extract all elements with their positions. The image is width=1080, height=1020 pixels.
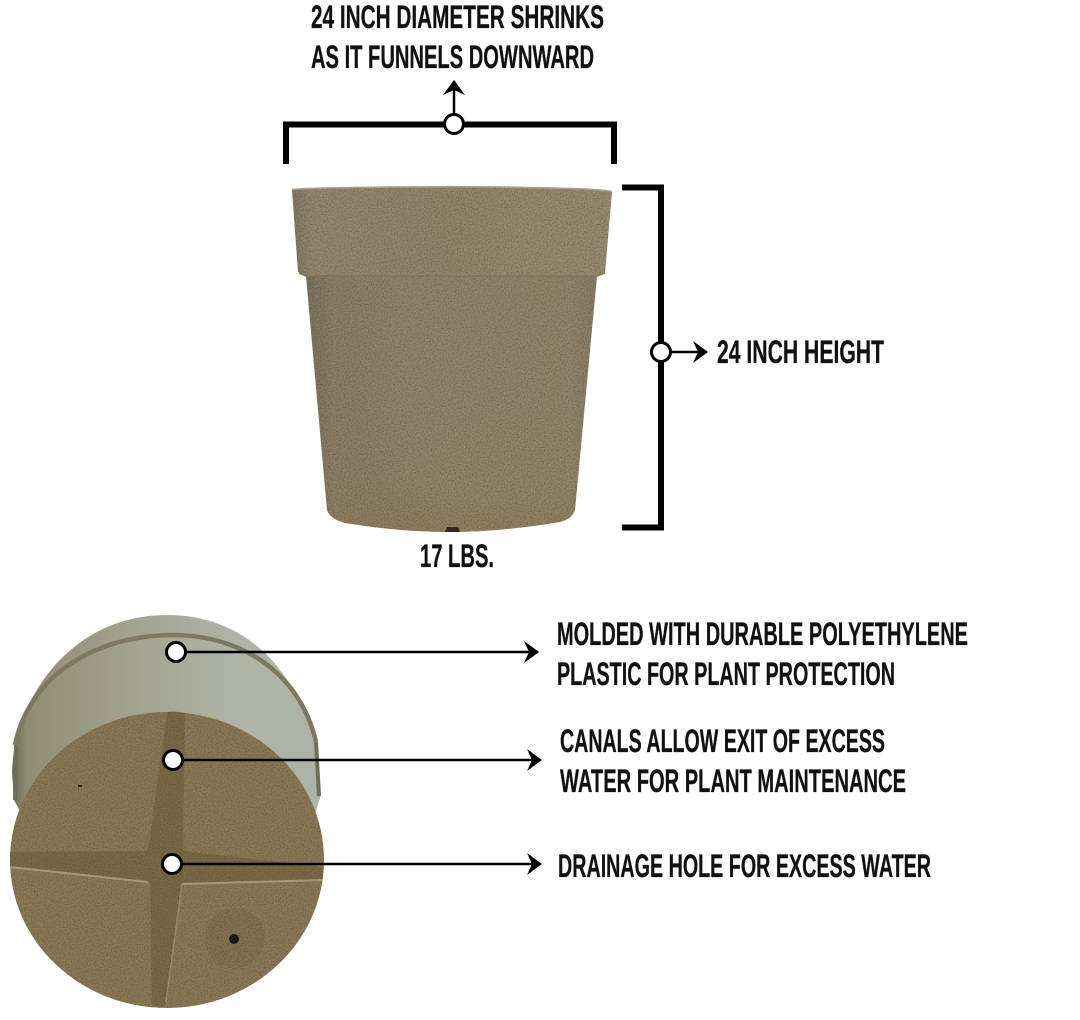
callout: canals — [164, 723, 906, 799]
boss hole — [229, 934, 239, 944]
canal side edge — [166, 884, 182, 1002]
base disc with canals — [10, 712, 324, 1008]
height label: 24 INCH HEIGHT — [717, 334, 884, 370]
dark wall edge — [15, 742, 319, 800]
diameter bracket with arrow — [286, 81, 614, 164]
pot side view — [292, 186, 612, 532]
heading: diameter label: AS IT FUNNELS DOWNWARD — [311, 39, 594, 75]
canal highlights — [10, 867, 322, 884]
rim ring — [15, 635, 316, 745]
callout: polyethylene — [166, 616, 968, 692]
pot bottom view — [10, 615, 324, 1008]
height bracket with arrow — [622, 188, 707, 528]
weight label: 17 LBS. — [420, 538, 494, 574]
pot wall seen from below — [12, 615, 321, 830]
heading: diameter label: 24 INCH DIAMETER SHRINKS — [311, 0, 604, 35]
small pin mark — [78, 785, 82, 787]
heading: diameter label — [311, 0, 604, 75]
callout: drainage hole — [162, 848, 931, 884]
callout: canals: CANALS ALLOW EXIT OF EXCESS — [560, 723, 885, 759]
